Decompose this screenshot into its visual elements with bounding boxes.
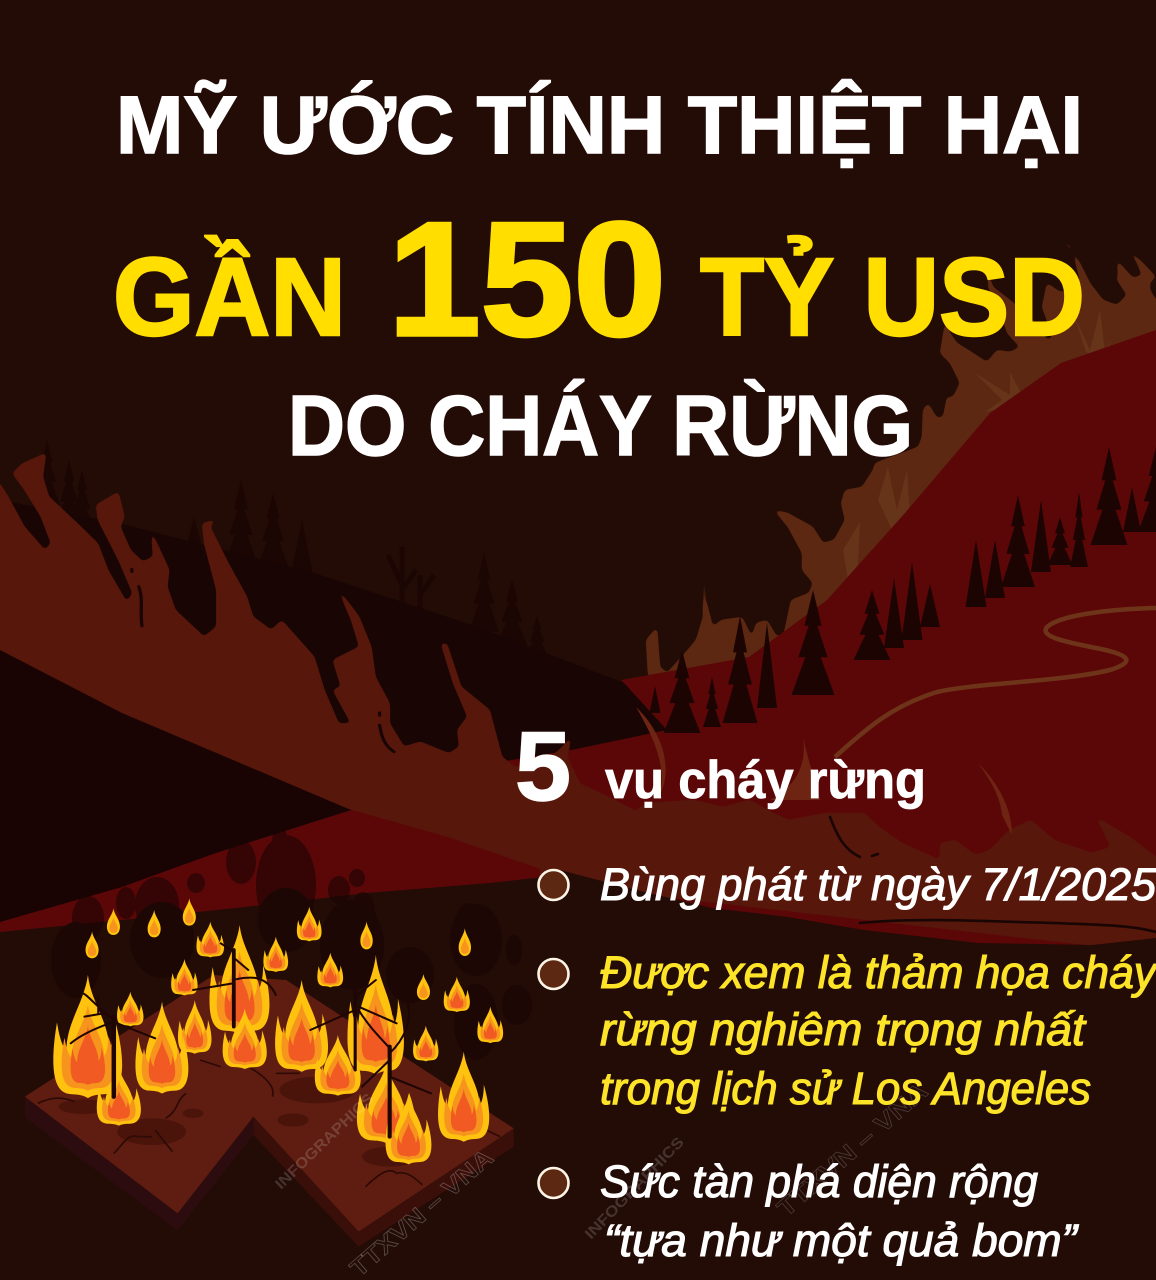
ground top	[25, 975, 514, 1232]
big number: 5	[515, 711, 571, 821]
brown flame band, left	[0, 447, 640, 870]
heading: 5 wildfires	[515, 711, 926, 821]
dark drip lines on the band	[830, 817, 1156, 932]
red hillside	[0, 330, 1156, 950]
right hillside: burning brown slope	[646, 238, 1156, 720]
watermark: INFOGRAPHICS	[272, 1090, 377, 1193]
brown flame band, right	[540, 783, 1156, 960]
title line 1: MỸ ƯỚC TÍNH THIỆT HẠI	[116, 80, 1083, 171]
title line 2: gần: GẦN	[113, 236, 346, 359]
bullet 2	[538, 947, 1156, 1114]
burnt tree trunks and branches	[71, 943, 431, 1137]
watermark: INFOGRAPHICS	[582, 1134, 688, 1243]
pine trees on red hillside	[650, 447, 1156, 733]
bullet 1: Bùng phát từ ngày 7/1/2025	[600, 859, 1156, 910]
fire: small flames	[117, 907, 503, 1061]
burnt trees behind the fire	[72, 827, 483, 947]
bullet 3: Sức tàn phá diện rộng	[600, 1156, 1038, 1207]
title	[113, 80, 1085, 474]
far forest silhouettes	[34, 440, 548, 656]
ground shadows	[59, 1077, 417, 1167]
fire: big flames	[53, 925, 489, 1164]
bullet 3	[538, 1156, 1079, 1266]
winding road	[835, 608, 1156, 757]
heading text: vụ cháy rừng	[605, 751, 926, 810]
faint flame crescents over the red hill	[636, 707, 1012, 835]
ground side faces	[25, 1097, 253, 1231]
illustration: isometric burning ground	[25, 898, 514, 1247]
watermark	[272, 1077, 933, 1280]
ground cracks	[38, 1060, 500, 1187]
title line 2: tỷ usd: TỶ USD	[700, 236, 1085, 359]
bullet 2: trong lịch sử Los Angeles	[600, 1063, 1091, 1114]
fire: floating sparks	[86, 898, 471, 1000]
bullet 3: “tựa như một quả bom”	[604, 1215, 1079, 1266]
dark triangle, lower left	[0, 650, 351, 922]
watermark: TTXVN – VNA	[772, 1077, 933, 1223]
drip marks	[132, 569, 573, 817]
watermark: TTXVN – VNA	[345, 1144, 499, 1280]
dark hill on the left	[0, 500, 667, 770]
title line 2: 150: 150	[388, 189, 666, 370]
bullet 2: rừng nghiêm trọng nhất	[600, 1004, 1088, 1055]
title line 3: DO CHÁY RỪNG	[288, 379, 913, 474]
lower dark ground	[0, 870, 1156, 1280]
bullet 2: Được xem là thảm họa cháy	[600, 947, 1156, 998]
faint flame leaves	[843, 310, 1112, 580]
